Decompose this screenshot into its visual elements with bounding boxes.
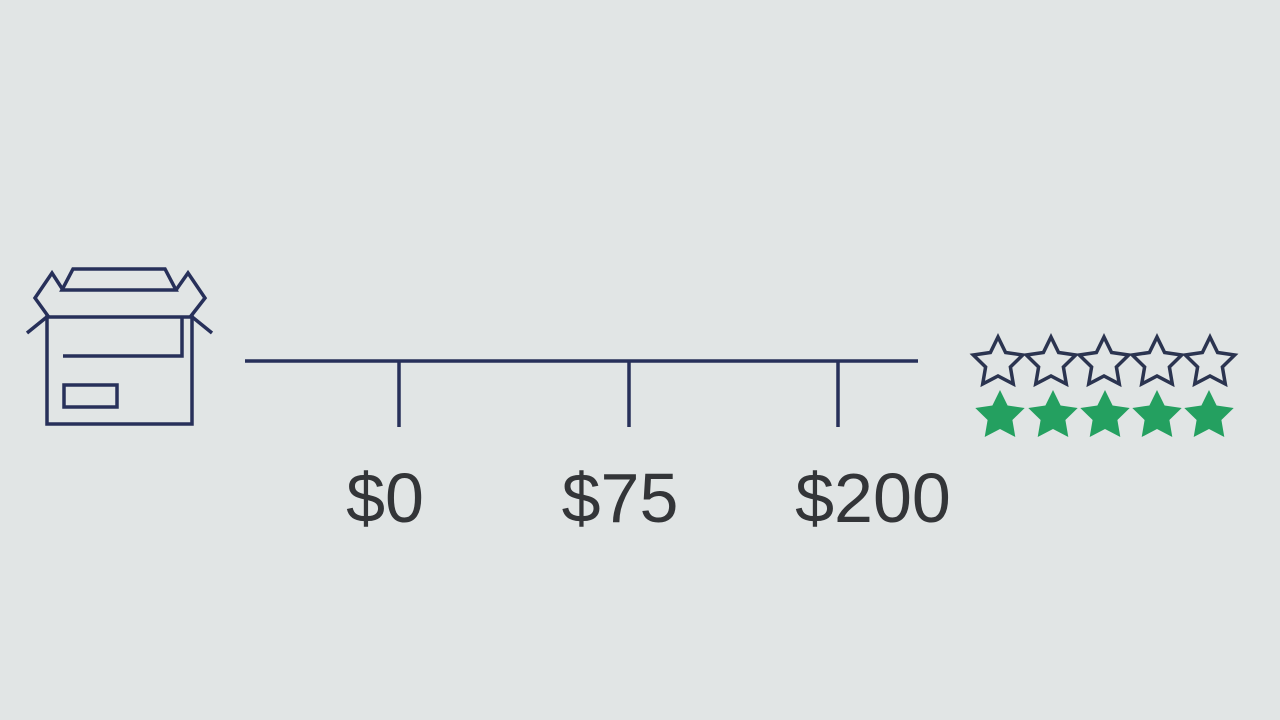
price labels (346, 459, 951, 537)
icon: outline stars (973, 337, 1235, 384)
icon: open box (27, 269, 212, 424)
price labels: $200 (795, 459, 951, 537)
timeline axis (245, 361, 918, 427)
price labels: $75 (562, 459, 678, 537)
icon: filled green stars (975, 390, 1234, 437)
price labels: $0 (346, 459, 424, 537)
